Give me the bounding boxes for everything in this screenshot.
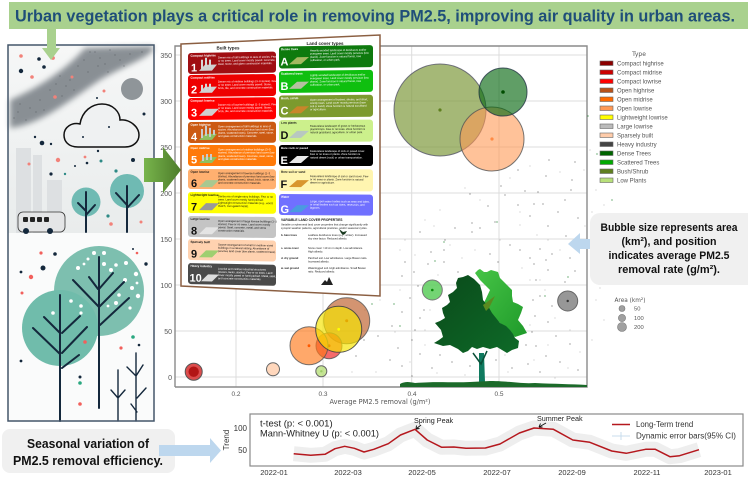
gridlines and axes bbox=[175, 46, 587, 387]
arrow: from title down to illustration bbox=[42, 29, 60, 60]
legend: type: Type bbox=[631, 51, 646, 58]
land cover D: D bbox=[280, 130, 288, 142]
annotation: spring peak: Spring Peak bbox=[414, 416, 454, 425]
built type 3: or no trees. Land cover mostly paved. Stone, bbox=[218, 105, 272, 110]
callout: bubble size explanation: indicates average PM2.5 bbox=[608, 250, 730, 262]
annotation: summer peak bbox=[537, 414, 583, 427]
land cover B: Lightly wooded landscape of deciduous and/or bbox=[310, 72, 365, 77]
built type 6: stories). Abundance of pervious land cover (low bbox=[218, 174, 275, 179]
built type 3: Compact lowrise bbox=[190, 99, 215, 103]
land cover G: or small bodies such as rivers, reservoirs, and bbox=[310, 202, 365, 207]
land cover F: Bare soil or sand bbox=[281, 170, 306, 174]
y axis labels: 50 bbox=[238, 446, 248, 455]
land cover C: soil or sand). Zone function is natural scrubland bbox=[310, 104, 367, 108]
built type 7: Dense mix of single-story buildings. Few or no bbox=[218, 194, 273, 199]
built type 4: 4 bbox=[191, 131, 198, 143]
land cover B: Scattered trees bbox=[281, 72, 303, 76]
bubble: heavy industry bbox=[558, 291, 578, 311]
bubble: compact highrise and midrise bbox=[185, 363, 202, 380]
land cover F: desert or agriculture. bbox=[310, 181, 335, 185]
land cover C bbox=[279, 95, 373, 118]
small seedlings bbox=[111, 353, 146, 421]
buildings bbox=[16, 148, 62, 233]
variable land cover properties: Variable or ephemeral land cover properties that change significantly with bbox=[281, 222, 369, 226]
built type 3 bbox=[188, 97, 276, 120]
land cover E: Few or no trees or plants. Zone function is bbox=[310, 152, 361, 156]
built type 3: Dense mix of lowrise buildings (1–3 stories). Few bbox=[218, 102, 276, 107]
chart: seasonal trend line bbox=[222, 414, 743, 477]
chart: bubble scatter of PM2.5 removal by land type bbox=[160, 46, 612, 406]
built type 5: stories). Abundance of pervious land cover (low bbox=[218, 151, 275, 155]
labels: Compact lowrise bbox=[617, 80, 662, 86]
built type 10: (towers, tanks, stacks). Few or no trees. Land bbox=[218, 270, 273, 275]
built type 2: or no trees. Land cover mostly paved. Stone, bbox=[218, 82, 272, 87]
heading: land cover types: Land cover types bbox=[306, 41, 344, 46]
labels bbox=[617, 62, 668, 184]
built type 7 bbox=[188, 192, 276, 214]
land cover A: A bbox=[280, 56, 288, 68]
land cover E: E bbox=[280, 155, 288, 167]
built type 3: 3 bbox=[191, 107, 197, 119]
callout: bubble size explanation: (km²), and position bbox=[622, 236, 717, 248]
built type 3: brick, tile, and concrete construction materials. bbox=[218, 109, 274, 113]
callout: bubble size explanation: Bubble size represents area bbox=[600, 222, 738, 234]
chart frame bbox=[250, 414, 743, 466]
built type 5: and glass construction materials. bbox=[218, 157, 257, 161]
built type 7: 7 bbox=[191, 202, 197, 214]
tree illustration bbox=[400, 269, 587, 387]
land cover C: Bush, scrub bbox=[281, 96, 299, 100]
variable land cover properties: Increased albedo. bbox=[308, 260, 330, 264]
built type 9: Sparse arrangement of small or medium-sized bbox=[218, 243, 274, 247]
labels: Scattered Trees bbox=[617, 160, 659, 166]
variable land cover properties: d. dry ground bbox=[281, 256, 299, 260]
legend: area: 50 bbox=[634, 306, 640, 312]
built type 4: stories. Abundance of pervious land cover (low bbox=[218, 127, 274, 132]
variable land cover properties: w. wet ground bbox=[280, 266, 299, 270]
long-term trend line bbox=[294, 428, 699, 457]
statistics text: Mann-Whitney U (p: < 0.001) bbox=[260, 428, 379, 440]
built type 10: Lowrise and midrise industrial structures bbox=[218, 267, 267, 272]
labels: Open midrise bbox=[617, 98, 653, 104]
callout: seasonal variation: PM2.5 removal efficiency. bbox=[13, 454, 163, 468]
built type 4: plants, scattered trees). Concrete, steel, stone, bbox=[218, 131, 274, 135]
swatches bbox=[600, 61, 613, 182]
built type 5: Open arrangement of midrise buildings (3–9 bbox=[218, 148, 271, 152]
built type 10 bbox=[188, 263, 276, 286]
x axis dates: 2023-01 bbox=[704, 468, 732, 477]
built type 5: Open midrise bbox=[190, 146, 210, 150]
built type 10: Heavy industry bbox=[190, 264, 212, 268]
built type 6: and concrete construction materials. bbox=[218, 181, 261, 185]
labels: Compact highrise bbox=[617, 62, 664, 68]
large tree front bbox=[22, 290, 98, 421]
built type 6: Open lowrise bbox=[190, 170, 210, 174]
built type 4 bbox=[188, 122, 276, 143]
built type 6: Open arrangement of lowrise buildings (1–3 bbox=[218, 171, 271, 175]
land cover C: Open arrangement of bushes, shrubs, and short, bbox=[310, 97, 368, 102]
labels: Open highrise bbox=[617, 88, 655, 94]
icon: small bird mark bbox=[339, 229, 347, 235]
built type 8: 8 bbox=[191, 226, 197, 238]
built type 8: paved. Steel, concrete, metal, and stone bbox=[218, 225, 267, 230]
card sheet bbox=[181, 35, 380, 296]
land cover C: or agriculture. bbox=[310, 107, 327, 111]
bubble: open highrise bbox=[324, 298, 370, 344]
panel frame bbox=[8, 45, 154, 421]
built type 8 bbox=[188, 216, 277, 239]
bubble: open midrise bbox=[290, 327, 328, 365]
variable land cover properties: ratio. Reduced albedo. bbox=[308, 270, 335, 274]
labels: Lightweight lowrise bbox=[617, 116, 668, 122]
land cover E: Bare rock or paved bbox=[281, 146, 308, 150]
built type 2: 2 bbox=[191, 84, 197, 96]
variable land cover properties: High albedo. bbox=[308, 250, 323, 254]
callout: seasonal variation bbox=[2, 429, 175, 473]
labels: Heavy industry bbox=[617, 142, 657, 148]
y axis tick labels: 300 bbox=[160, 99, 172, 106]
bus bbox=[18, 212, 65, 234]
land cover B: B bbox=[280, 81, 288, 93]
variable land cover properties: Waterlogged soil. High admittance. Small Bowen bbox=[308, 266, 367, 270]
land cover B: evergreen trees. Land cover mostly pervious (low bbox=[310, 76, 369, 80]
built type 4: and glass construction materials. bbox=[218, 134, 257, 138]
bubble: lightweight lowrise bbox=[316, 306, 362, 352]
y axis tick labels: 200 bbox=[160, 191, 172, 198]
x axis dates: 2022-05 bbox=[408, 468, 436, 477]
arrow: callout to chart bbox=[568, 233, 603, 254]
labels: Dense Trees bbox=[617, 152, 651, 158]
y axis tick labels: 100 bbox=[160, 283, 172, 290]
panel: local climate zone card bbox=[181, 35, 380, 296]
built type 7: trees. Land cover mostly hard-packed. bbox=[218, 197, 264, 202]
labels: Sparsely built bbox=[617, 134, 653, 140]
variable land cover properties: Snow cover >10 cm in depth. Low admittance. bbox=[308, 246, 363, 250]
land cover A bbox=[279, 45, 373, 68]
land cover D bbox=[279, 120, 373, 142]
small teal tree right bbox=[110, 174, 144, 232]
statistics text: t-test (p: < 0.001) bbox=[260, 418, 333, 430]
bubble: sparsely built bbox=[266, 363, 280, 376]
built type 10: and concrete construction materials. bbox=[218, 276, 261, 281]
callout: seasonal variation: Seasonal variation of bbox=[27, 437, 150, 451]
upper scene background bbox=[8, 45, 154, 233]
built type 1: steel, stone, and glass construction materials. bbox=[218, 61, 273, 66]
scatter of small particles bbox=[352, 116, 612, 378]
arrow: illustration to card bbox=[144, 147, 181, 193]
x axis tick labels: 0.5 bbox=[494, 391, 504, 398]
land cover A: cultivation, or urban park. bbox=[310, 58, 340, 62]
legend: area bbox=[614, 297, 646, 332]
variable land cover properties: b. bare trees bbox=[281, 233, 297, 237]
bubble: open lowrise bbox=[460, 107, 524, 171]
built type 9: buildings in a natural setting. Abundance of bbox=[218, 246, 269, 251]
land cover B: cultivation, or urban park. bbox=[310, 82, 340, 87]
built type 1 bbox=[188, 52, 276, 74]
labels: Compact midrise bbox=[617, 70, 663, 76]
variable land cover properties: Leafless deciduous trees (e.g., winter). Increased bbox=[308, 233, 367, 237]
bubble: bush/shrub bbox=[394, 64, 486, 156]
land cover D: natural grassland, agriculture, or urban park. bbox=[310, 130, 363, 134]
land cover B bbox=[279, 70, 373, 93]
built type 8: construction materials. bbox=[218, 228, 245, 233]
built type 10: cover mostly paved or hard-packed. Metal, steel, bbox=[218, 273, 276, 278]
built type 8: Large lowrise bbox=[190, 217, 210, 221]
built type 1: 1 bbox=[191, 62, 197, 74]
title banner: Urban vegetation plays a critical role in removing PM2.5, improving air quality in urban areas. bbox=[15, 6, 735, 26]
built type 6: 6 bbox=[191, 178, 197, 190]
land cover E: Featureless landscape of rock or paved cover. bbox=[310, 149, 365, 153]
built type 5 bbox=[188, 145, 276, 166]
confidence band bbox=[294, 428, 699, 457]
built type 9 bbox=[188, 239, 276, 262]
built type 2: Dense mix of midrise buildings (3–9 stories). Few bbox=[218, 79, 277, 84]
built type 7: Lightweight construction materials (e.g., wood, bbox=[218, 201, 274, 205]
x axis dates: 2022-01 bbox=[260, 468, 288, 477]
y axis tick labels: 250 bbox=[160, 145, 172, 152]
y axis tick labels: 150 bbox=[160, 237, 172, 244]
x axis title: Average PM2.5 removal (g/m²) bbox=[330, 398, 430, 406]
y axis labels bbox=[234, 424, 248, 455]
legend: error bars: Dynamic error bars(95% CI) bbox=[636, 432, 736, 440]
land cover C: woody trees. Land cover mostly pervious (bare bbox=[310, 100, 366, 105]
built type 9: 9 bbox=[191, 249, 197, 261]
bubble: low plants bbox=[316, 366, 327, 377]
x axis tick labels: 0.4 bbox=[407, 391, 417, 398]
heading: built types: Built types bbox=[216, 46, 240, 50]
built type 6: plants, scattered trees). Wood, brick, stone, tile, bbox=[218, 178, 275, 182]
land cover F: or no trees or plants. Zone function is natural bbox=[310, 177, 364, 181]
land cover A: plants). Zone function is natural forest, tree bbox=[310, 54, 362, 59]
built type 8: stories). Few or no trees. Land cover mostly bbox=[218, 222, 271, 227]
land cover F: F bbox=[280, 179, 287, 191]
coloured particles lower scene bbox=[20, 248, 148, 406]
bubble: dense trees bbox=[479, 68, 527, 116]
callout: bubble size explanation: removal rate (g/m²). bbox=[618, 264, 720, 276]
labels: Low Plants bbox=[617, 178, 646, 184]
built type 9: Sparsely built bbox=[190, 240, 210, 244]
land cover A: evergreen trees. Land cover mostly pervious (low bbox=[310, 51, 369, 56]
large tree back bbox=[54, 246, 144, 408]
built type 7: Lightweight lowrise bbox=[190, 193, 219, 197]
built type 1: Compact highrise bbox=[190, 53, 216, 58]
built type 6 bbox=[188, 169, 276, 190]
land cover G bbox=[279, 194, 373, 217]
legend: area: 100 bbox=[634, 316, 644, 322]
x axis tick labels: 0.3 bbox=[318, 391, 328, 398]
title banner bbox=[9, 2, 748, 29]
variable land cover properties: s. snow cover bbox=[281, 246, 299, 250]
variable land cover properties: Parched soil. Low admittance. Large Bowen ratio. bbox=[308, 256, 367, 260]
annotation: summer peak: Summer Peak bbox=[537, 414, 583, 423]
land cover G: lagoons. bbox=[310, 206, 320, 210]
built type 9: pervious land cover (low plants, scattered trees). bbox=[218, 249, 276, 254]
legend: area: 200 bbox=[634, 325, 644, 331]
variable land cover properties bbox=[280, 218, 369, 274]
y axis tick labels: 50 bbox=[164, 329, 172, 336]
land cover A: Dense trees bbox=[281, 47, 298, 51]
land cover D: Low plants bbox=[281, 121, 297, 125]
built type 2: Compact midrise bbox=[190, 75, 215, 80]
built type 7: thatch, corrugated metal). bbox=[218, 204, 249, 208]
small teal tree left bbox=[72, 188, 100, 232]
legend: area: Area (km²) bbox=[614, 297, 646, 304]
built type 2 bbox=[188, 74, 277, 97]
labels: Bush/Shrub bbox=[617, 170, 649, 176]
bubble: compact lowrise bbox=[316, 333, 342, 359]
x axis tick labels bbox=[231, 391, 504, 398]
land cover G: Water bbox=[281, 195, 290, 199]
land cover A: Heavily wooded landscape of deciduous and/or bbox=[310, 48, 366, 53]
icon: mountain logo bbox=[321, 277, 333, 285]
land cover G: G bbox=[280, 204, 289, 216]
y axis tick labels: 0 bbox=[168, 375, 172, 382]
y axis labels: 100 bbox=[234, 424, 248, 433]
built type 4: Open highrise bbox=[190, 123, 211, 127]
x axis dates bbox=[260, 468, 732, 477]
land cover B: plants). Zone function is natural forest, tree bbox=[310, 79, 362, 84]
land cover D: Featureless landscape of grass or herbaceous bbox=[310, 124, 366, 128]
legend: trend line: Long-Term trend bbox=[636, 420, 693, 429]
labels: Open lowrise bbox=[617, 106, 653, 112]
land cover C: C bbox=[280, 105, 288, 117]
land cover E bbox=[279, 145, 373, 167]
cloud outline bbox=[64, 104, 139, 147]
y axis tick labels: 350 bbox=[160, 53, 172, 60]
built type 1: or no trees. Land cover mostly paved. Concrete, bbox=[218, 58, 276, 63]
y axis tick labels bbox=[160, 53, 172, 382]
built type 1: Dense mix of tall buildings to tens of stories. Few bbox=[218, 55, 276, 60]
built type 5: plants, scattered trees). Concrete, steel, stone, bbox=[218, 154, 274, 158]
built type 10: 10 bbox=[190, 273, 202, 285]
x axis dates: 2022-07 bbox=[483, 468, 511, 477]
callout: bubble size explanation bbox=[590, 213, 748, 285]
panel: urban illustration bbox=[8, 45, 154, 421]
legend: type bbox=[600, 51, 668, 184]
labels: Large lowrise bbox=[617, 124, 653, 130]
land cover F bbox=[279, 169, 373, 191]
coloured particles upper scene bbox=[19, 54, 145, 226]
land cover E: natural desert (rock) or urban transportation. bbox=[310, 155, 363, 159]
y axis title: Trend bbox=[222, 430, 231, 450]
land cover F: Featureless landscape of soil or sand cover. Few bbox=[310, 174, 368, 178]
built type 5: 5 bbox=[191, 154, 197, 166]
x axis dates: 2022-11 bbox=[634, 468, 660, 477]
x axis dates: 2022-03 bbox=[334, 468, 362, 477]
pollution particle in grey sphere bbox=[121, 78, 143, 100]
statistics text bbox=[260, 418, 379, 440]
pollution haze band bbox=[10, 46, 153, 128]
built type 4: Open arrangement of tall buildings to tens of bbox=[218, 124, 271, 128]
variable land cover properties: sky view factor. Reduced albedo. bbox=[308, 236, 348, 240]
bubble: scattered trees bbox=[422, 280, 442, 300]
x axis tick labels: 0.2 bbox=[231, 391, 241, 398]
annotation: spring peak bbox=[414, 416, 454, 429]
arrow: seasonal callout to trend chart bbox=[159, 438, 221, 463]
land cover G: Large, open water bodies such as seas and lakes, bbox=[310, 199, 370, 204]
built type 8: Open arrangement of large lowrise buildings (1–3 bbox=[218, 219, 277, 224]
lower scene background bbox=[8, 233, 154, 421]
x axis dates: 2022-09 bbox=[558, 468, 586, 477]
land cover D: plants/crops. Few or no trees. Zone function is bbox=[310, 127, 366, 131]
variable land cover properties: synoptic weather patterns, agricultural practices, and/or seasonal cycles. bbox=[281, 226, 368, 230]
built type 2: brick, tile, and concrete construction materials. bbox=[218, 85, 274, 90]
variable land cover properties: VARIABLE LAND COVER PROPERTIES bbox=[281, 218, 343, 222]
